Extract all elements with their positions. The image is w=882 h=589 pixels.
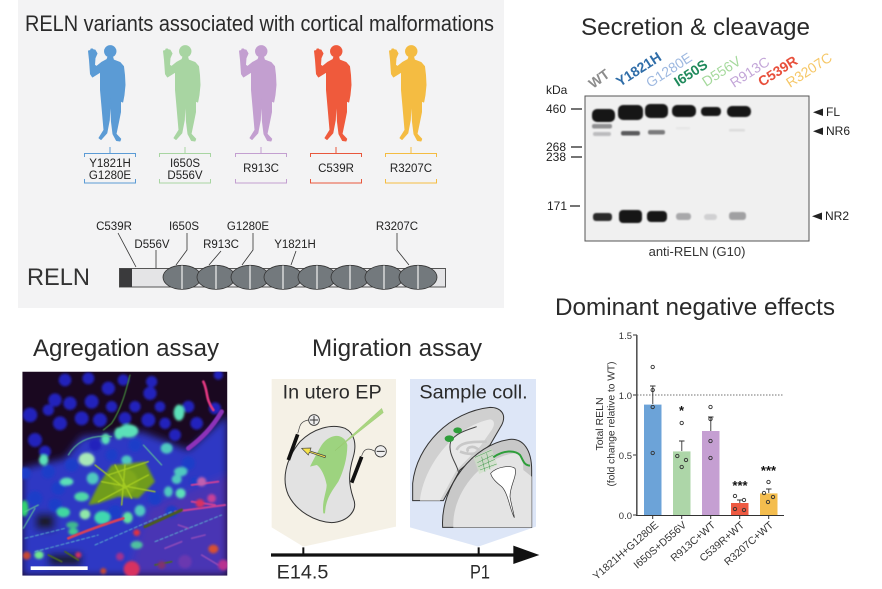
icon: green person — [164, 46, 200, 141]
bracket: R3207C: R3207C — [390, 163, 432, 175]
icon: red person — [314, 46, 351, 141]
bracket: R913C — [236, 147, 286, 183]
blot lane labels — [585, 49, 835, 91]
icon: embryonic brain electroporation — [285, 408, 386, 523]
label: P1: P1 — [470, 562, 490, 583]
molecular weight markers: kDa — [546, 83, 568, 97]
x axis labels: Y1821H+G1280E — [591, 519, 661, 582]
significance stars — [679, 403, 777, 493]
bracket: I650S D556V: D556V — [167, 170, 203, 182]
band annotations: NR2 — [825, 209, 849, 223]
bracket: C539R — [310, 147, 362, 183]
variant labels and leader lines: R3207C — [376, 221, 418, 233]
blot lane labels: I650S — [671, 56, 710, 90]
y axis ticks: 0.5 — [619, 451, 632, 462]
x axis labels: R913C+WT — [668, 519, 718, 564]
panel: sample collection — [410, 379, 536, 547]
y axis ticks: 1.5 — [619, 331, 632, 342]
icon: yellow person — [390, 46, 426, 141]
panel: migration assay schematic — [271, 379, 539, 583]
panel: western blot — [546, 49, 850, 259]
label: Sample coll.: Sample coll. — [419, 383, 528, 404]
timeline arrow — [271, 546, 539, 564]
panel: in utero EP — [272, 379, 396, 547]
diagram: RELN protein domains — [120, 265, 446, 289]
y axis title — [594, 362, 618, 486]
band annotations: FL — [826, 105, 840, 119]
x axis labels — [591, 519, 776, 582]
title: RELN variants: RELN variants associated with cortical malformations — [25, 11, 494, 36]
bracket: C539R: C539R — [318, 163, 354, 175]
panel: RELN variants — [18, 0, 504, 308]
x axis labels: R3207C+WT — [722, 519, 776, 568]
variant labels and leader lines: R913C — [203, 239, 239, 251]
molecular weight markers: 238 — [546, 150, 566, 164]
micrograph: aggregation assay — [19, 370, 229, 577]
significance stars: *** — [761, 463, 777, 478]
significance stars: * — [679, 403, 685, 418]
band annotations — [812, 105, 850, 223]
icon: blue person — [88, 46, 125, 141]
y axis ticks: 1.0 — [619, 391, 632, 402]
title: Agregation assay: Agregation assay — [33, 335, 219, 362]
bracket: Y1821H G1280E — [84, 147, 136, 183]
variant labels and leader lines: Y1821H — [274, 239, 316, 251]
bracket: R913C: R913C — [243, 163, 279, 175]
reference line — [637, 394, 784, 396]
blot lane labels: D556V — [699, 52, 744, 90]
blot lane labels: R913C — [727, 53, 772, 91]
error bars — [650, 386, 772, 503]
significance stars: *** — [732, 478, 749, 493]
icon: postnatal brain sections — [413, 407, 532, 527]
x axis labels: I650S+D556V — [632, 519, 689, 571]
variant labels and leader lines — [96, 221, 418, 268]
label: RELN gene: RELN — [27, 264, 90, 291]
blot lane labels: G1280E — [643, 49, 695, 91]
blot lane labels: R3207C — [783, 49, 835, 91]
y axis ticks: 0.0 — [619, 511, 632, 522]
title: Dominant negative effects: Dominant negative effects — [555, 294, 835, 321]
blot lane labels: C539R — [755, 52, 800, 90]
scale bar — [31, 566, 88, 570]
variant labels and leader lines: D556V — [134, 239, 170, 251]
molecular weight markers: 460 — [546, 102, 566, 116]
bracket: I650S D556V — [160, 147, 210, 183]
blot membrane — [585, 96, 809, 241]
bars — [644, 405, 778, 515]
band annotations: NR6 — [826, 124, 850, 138]
y axis title: Total RELN — [594, 397, 606, 451]
molecular weight markers — [546, 83, 582, 213]
data points — [651, 365, 775, 512]
title: Migration assay: Migration assay — [312, 335, 482, 362]
icon: purple person — [240, 46, 276, 141]
bracket: I650S D556V: I650S — [170, 158, 200, 170]
y axis title: (fold change relative to WT) — [606, 362, 618, 486]
bracket: Y1821H G1280E: G1280E — [89, 170, 131, 182]
blot caption: anti-RELN (G10) — [649, 244, 745, 259]
blot lane labels: Y1821H — [613, 49, 664, 90]
y axis ticks — [619, 331, 632, 522]
axes — [633, 335, 784, 519]
bracket: Y1821H G1280E: Y1821H — [89, 158, 131, 170]
label: In utero EP: In utero EP — [283, 383, 382, 404]
molecular weight markers: 268 — [546, 140, 566, 154]
label: E14.5: E14.5 — [277, 562, 328, 583]
title: Secretion & cleavage: Secretion & cleavage — [581, 14, 810, 41]
molecular weight markers: 171 — [547, 199, 567, 213]
blot lane labels: WT — [585, 65, 613, 91]
variant labels and leader lines: G1280E — [227, 221, 269, 233]
bar chart: total RELN — [591, 331, 784, 582]
variant labels and leader lines: I650S — [169, 221, 199, 233]
variant labels and leader lines: C539R — [96, 221, 132, 233]
bracket: R3207C — [386, 147, 436, 183]
x axis labels: C539R+WT — [697, 519, 747, 564]
